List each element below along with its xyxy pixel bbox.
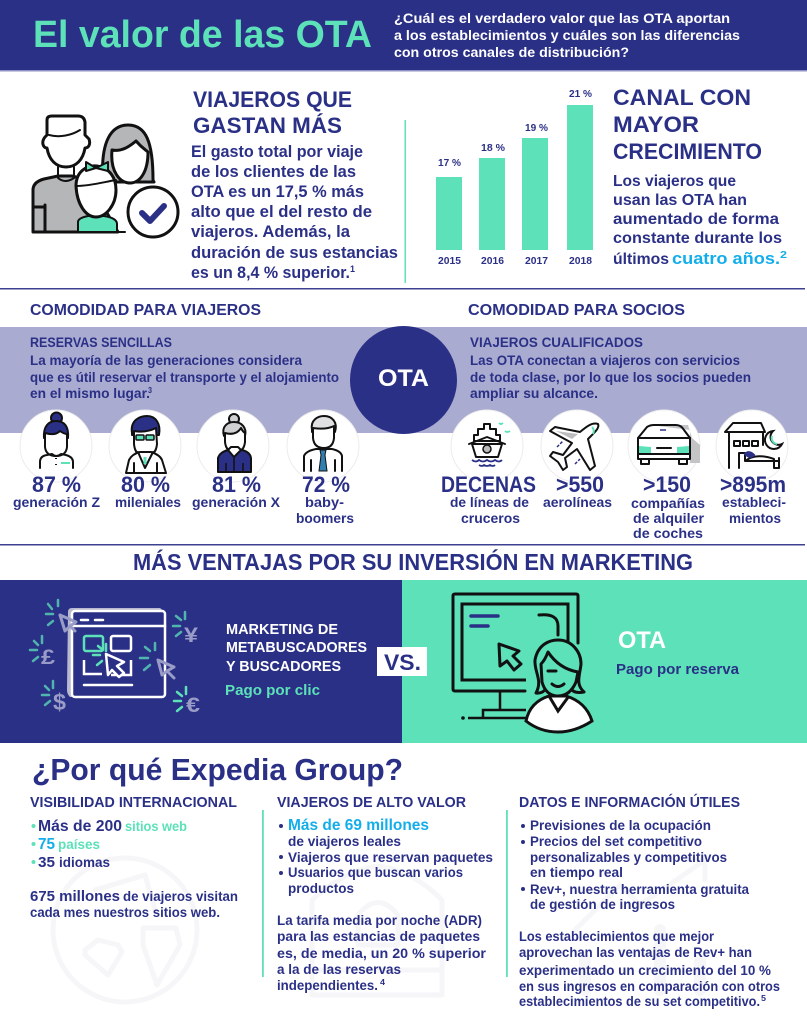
heading: DATOS E INFORMACIÓN ÚTILES [519,793,740,811]
OTA circle: OTA [378,365,429,392]
heading: por qué Expedia Group: ¿Por qué Expedia Group? [32,752,403,787]
stat: generación X: 81 % [212,472,261,497]
icon: generación X [197,410,269,482]
title: El valor de las OTA [33,14,372,56]
text block: experimentado un crecimiento del 10 % [519,963,771,978]
list: idiomas [59,855,110,870]
icon: browser window with cursors and currencies: £ [41,646,55,669]
stat: establecimientos: mientos [729,511,781,526]
text block [30,888,238,920]
lavender band [0,327,807,433]
stat: alquiler de coches [631,472,705,541]
stat: generación X [192,472,280,510]
text block: establecimientos de su set competitivo. [519,994,760,1009]
text block [616,627,740,678]
stats: partners [441,472,786,541]
text block: para las estancias de paquetes [277,929,480,944]
text block: viajeros cualificados [470,335,751,401]
icon: family with check mark [33,116,178,237]
text block: duración de sus estancias [191,244,398,262]
text block: Pago por clic [225,682,320,699]
icon: browser window with cursors and currencies: $ [53,689,66,715]
list [521,818,749,912]
panel: OTA pago por reserva [402,580,807,743]
section heading: comodidad para socios: COMODIDAD PARA SOCIOS [468,302,685,319]
text block: viajeros cualificados: Las OTA conectan a viajeros con servicios [470,353,740,368]
stat: baby-boomers [296,472,354,526]
watermark: growth chart [575,860,705,990]
text block: MARKETING DE [226,621,338,638]
text block: Y BUSCADORES [226,658,341,675]
stat: cruceros [441,472,536,526]
list: Precios del set competitivo [530,834,702,849]
text block: reservas sencillas: La mayoría de las generaciones considera [30,353,302,368]
bar chart: growth 2015–2018: 2018 [569,255,592,267]
text block: viajeros. Además, la [191,223,351,241]
text block: cuatro años. [672,249,780,268]
column: visibilidad internacional [30,794,238,920]
list: Previsiones de la ocupación [530,818,711,833]
list: países [58,837,100,852]
text block: OTA es un 17,5 % más [191,183,364,201]
text block: constante durante los [613,230,782,247]
heading: CANAL CON [613,85,751,110]
heading: VIAJEROS QUE [193,87,352,112]
heading: CRECIMIENTO [613,139,762,164]
watermark: globe [53,858,197,1002]
text block: 1 [350,264,355,274]
stat: establecimientos [720,472,786,526]
text block: últimos [613,251,669,268]
header question: con otros canales de distribución? [394,44,629,60]
bar chart: growth 2015–2018: 18 % [481,142,506,154]
panel: canal con mayor crecimiento [613,85,788,268]
stat: mileniales: 80 % [121,472,170,497]
heading: VIAJEROS DE ALTO VALOR [277,794,466,811]
panel: marketing de metabuscadores [0,580,402,743]
bar chart: growth 2015–2018: 2017 [525,255,548,267]
list: personalizables y competitivos [530,850,727,865]
bar chart: growth 2015–2018: 21 % [569,88,593,100]
list: Más de 69 millones [288,817,429,834]
icon: browser window with cursors and currencies [30,600,200,717]
text block: reservas sencillas: 3 [148,386,152,395]
text block: es, de media, un 20 % superior [277,946,487,961]
VS badge [377,647,427,676]
panel: viajeros que gastan más [191,87,398,282]
icon: monitor and person [453,594,592,732]
column: datos e información útiles [519,793,780,1009]
column: viajeros de alto valor [277,794,493,993]
text block: viajeros cualificados: ampliar su alcance. [470,386,598,401]
stat: alquiler de coches: de coches [633,526,703,541]
list [32,818,187,871]
stat: alquiler de coches: de alquiler [633,511,705,526]
icon: hotel and bed [716,410,788,482]
stat: generación Z: generación Z [13,495,100,510]
icon: browser window with cursors and currencies: € [186,694,200,717]
list [279,817,493,896]
text block: en sus ingresos en comparación con otros [519,979,780,994]
stat: cruceros: de líneas de [450,495,529,510]
text block: de los clientes de las [191,163,356,181]
stat: generación X: generación X [192,495,280,510]
stat: establecimientos: >895m [720,472,786,497]
text block: reservas sencillas: que es útil reservar el transporte y el alojamiento [30,370,339,385]
text block: OTA [618,627,666,654]
text block: METABUSCADORES [226,639,367,656]
bar chart: growth 2015–2018: 2015 [438,255,461,267]
stat: aerolíneas: aerolíneas [543,495,612,510]
text block: 2 [780,250,788,261]
heading [193,87,352,138]
VS badge: VS. [384,650,421,675]
icon: browser window with cursors and currencies: ¥ [184,624,198,647]
header question: ¿Cuál es el verdadero valor que las OTA aportan [394,10,730,26]
stat: mileniales: mileniales [115,495,181,510]
bar chart: growth 2015–2018: 2016 [481,255,504,267]
icon: baby-boomers [287,410,359,482]
heading [613,85,762,164]
icon: rental car [628,410,700,482]
text block: Los establecimientos que mejor [519,929,715,944]
list: 35 [38,854,55,871]
text block: reservas sencillas: en el mismo lugar. [30,386,150,401]
text block: 4 [380,978,386,987]
heading: GASTAN MÁS [193,113,342,138]
stat: baby-boomers: boomers [296,511,354,526]
bar chart: growth 2015–2018 [436,88,593,267]
text block: viajeros cualificados: VIAJEROS CUALIFICADOS [470,335,643,350]
stat: alquiler de coches: compañías [631,496,705,511]
text block [225,621,367,699]
stat: alquiler de coches: >150 [643,472,691,497]
icon: mileniales [109,410,181,482]
stat: mileniales [115,472,181,510]
stat: baby-boomers: 72 % [302,472,350,497]
text block [519,929,780,1009]
text block: independientes. [277,978,378,993]
text block [277,913,487,993]
list: productos [288,881,354,896]
text block: Los viajeros que [613,173,736,190]
text block: viajeros cualificados: de toda clase, por lo que los socios pueden [470,370,751,385]
list: de gestión de ingresos [530,897,675,912]
text block [613,173,788,268]
heading: MAYOR [613,112,699,137]
list: Más de 200 [38,818,122,835]
heading: VISIBILIDAD INTERNACIONAL [30,794,237,811]
list: 75 [38,836,55,853]
stat: cruceros: cruceros [461,511,520,526]
text block: alto que el del resto de [191,203,372,221]
header question [394,10,740,60]
stat: establecimientos: estableci- [722,495,786,510]
list: de viajeros leales [288,834,401,849]
watermark: suitcase [312,866,442,995]
section heading: comodidad para viajeros: COMODIDAD PARA VIAJEROS [30,302,261,319]
text block: La tarifa media por noche (ADR) [277,913,482,928]
text block: a la de las reservas [277,962,401,977]
stat: aerolíneas: >550 [556,472,604,497]
text block: reservas sencillas: RESERVAS SENCILLAS [30,335,172,350]
text block: es un 8,4 % superior. [191,264,350,282]
list: Rev+, nuestra herramienta gratuita [530,882,749,897]
text block: aprovechan las ventajas de Rev+ han [519,945,752,960]
stats: generations [13,472,354,526]
text block: El gasto total por viaje [191,143,363,161]
text block: reservas sencillas [30,335,339,401]
list: Viajeros que reservan paquetes [288,850,493,865]
text block: de viajeros visitan [123,889,238,904]
list: en tiempo real [530,865,623,880]
text block: aumentado de forma [613,211,779,228]
stat: generación Z [13,472,100,510]
text block: 5 [761,994,767,1003]
list: sitios web [125,819,187,834]
header question: a los establecimientos y cuáles son las diferencias [394,27,740,43]
stat: aerolíneas [543,472,612,510]
text block: 675 millones [30,888,120,905]
header band [0,0,807,72]
list: Usuarios que buscan varios [288,865,463,880]
stat: baby-boomers: baby- [305,495,344,510]
text block [191,143,398,282]
text block: Pago por reserva [616,661,740,678]
bar chart: growth 2015–2018: 19 % [525,122,549,134]
text block: usan las OTA han [613,192,747,209]
text block: cada mes nuestros sitios web. [30,905,220,920]
icon: generación Z [20,410,92,482]
icon: airplane [541,410,613,482]
stat: cruceros: DECENAS [441,472,536,497]
bar chart: growth 2015–2018: 17 % [438,157,462,169]
stat: generación Z: 87 % [32,472,81,497]
icon: cruise ship [451,410,523,482]
heading: más ventajas: MÁS VENTAJAS POR SU INVERSIÓN EN MARKETING [133,548,693,575]
OTA circle [350,326,457,434]
